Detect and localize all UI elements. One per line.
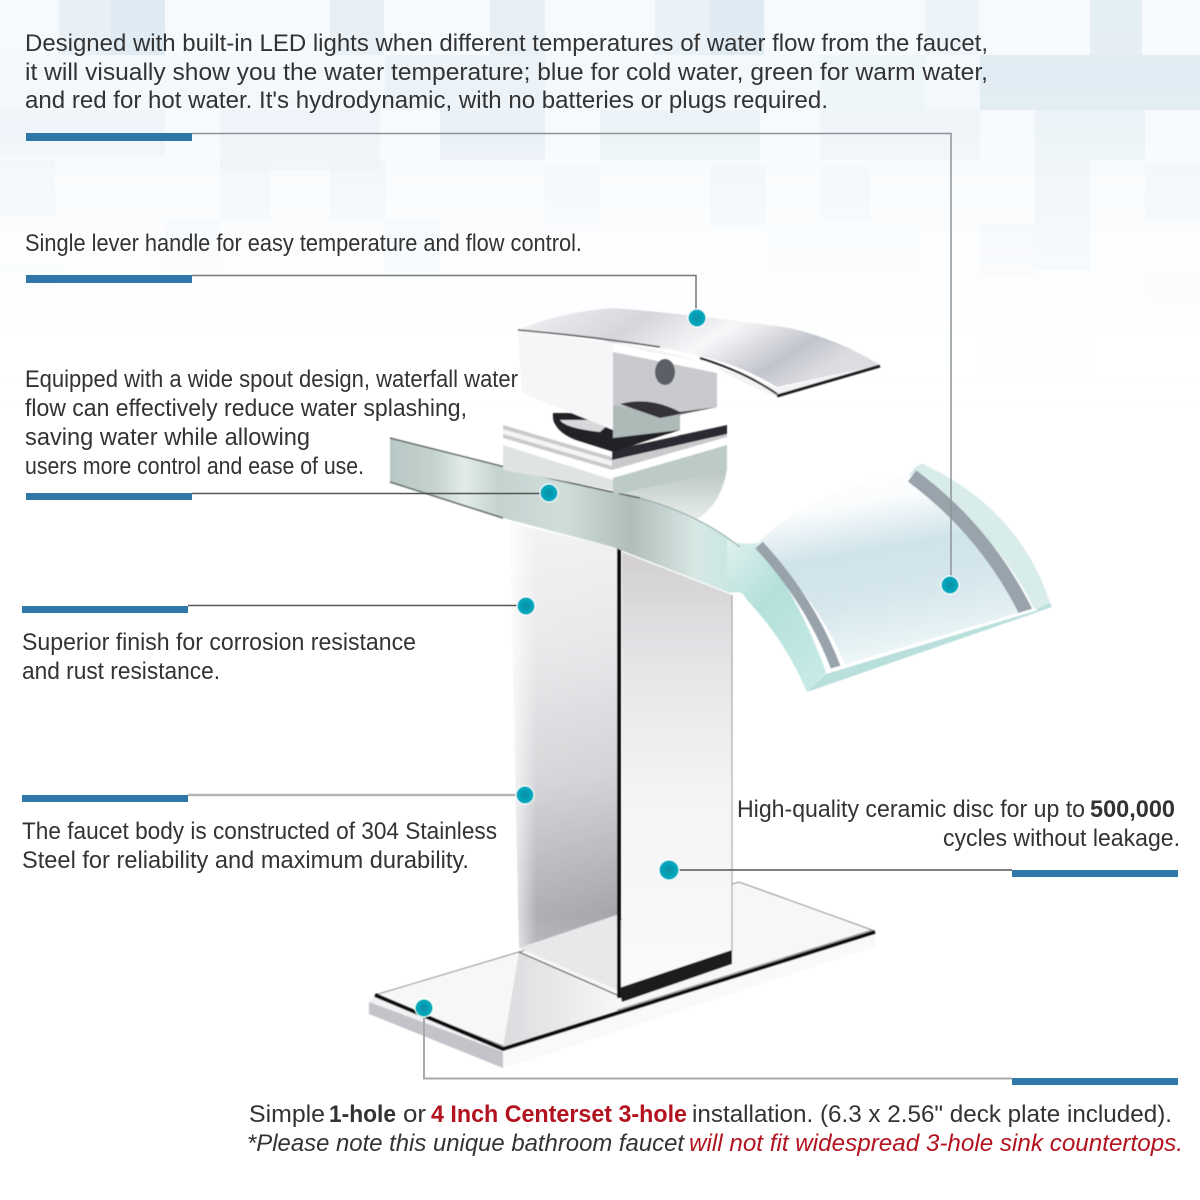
text: body: The faucet body is constructed of 304 Stainless: [22, 818, 497, 845]
text: ceramic: [737, 796, 1180, 852]
mirrored plate: [503, 445, 727, 490]
text: installation: installation. (6.3 x 2.56" deck plate included).: [692, 1101, 1172, 1128]
leader line and bar: [26, 275, 696, 318]
water sheet: [757, 474, 1026, 668]
text: installation: or: [403, 1101, 426, 1128]
text: spout: saving water while allowing: [25, 424, 310, 451]
callout: stainless body: [22, 795, 525, 874]
screw: [655, 359, 675, 385]
handle side panel: [613, 352, 717, 430]
text: finish: and rust resistance.: [22, 658, 220, 685]
text: finish: Superior finish for corrosion resistance: [22, 629, 416, 656]
text: spout: Equipped with a wide spout design, waterfall water: [25, 366, 518, 393]
text: finish: [22, 629, 416, 685]
text: spout: users more control and ease of use.: [25, 453, 364, 480]
spout top surface: [389, 420, 1050, 692]
text: ceramic: 500,000: [1090, 796, 1175, 823]
gray strips: [759, 545, 836, 668]
text: LED description: [25, 30, 988, 114]
glass lip: [807, 603, 1052, 692]
text: ceramic: High-quality ceramic disc for up to: [737, 796, 1085, 823]
text: body: [22, 818, 497, 874]
text: installation: 1-hole: [329, 1101, 396, 1128]
cartridge and square plate: [503, 413, 727, 495]
text: ceramic: cycles without leakage.: [943, 825, 1180, 852]
text: installation: Simple: [249, 1101, 325, 1128]
text: spout: flow can effectively reduce water splashing,: [25, 395, 467, 422]
faucet illustration: [369, 308, 1052, 1068]
handle body front: [518, 330, 613, 430]
callout: wide spout: [25, 366, 549, 500]
text: LED description: it will visually show you the water temperature; blue for cold water, green for warm water,: [25, 59, 988, 86]
lever top: [518, 308, 880, 387]
callout: LED temperature: [25, 30, 988, 585]
lever underside: [613, 343, 880, 397]
leader line and bar: [669, 870, 1178, 877]
deck plate: [369, 882, 875, 1068]
leader line and bar: [22, 606, 526, 613]
leader line and bar: [424, 1008, 1178, 1085]
text: LED description: Designed with built-in LED lights when different temperatures of water flow from the faucet,: [25, 30, 988, 57]
column: [510, 523, 732, 1002]
leader line and bar: [26, 493, 549, 500]
text: installation: [247, 1101, 1183, 1157]
leader line and bar: [26, 133, 951, 585]
glass spout: [389, 420, 1052, 692]
text: LED description: and red for hot water. It's hydrodynamic, with no batteries or plugs required.: [25, 87, 828, 114]
front band: [390, 438, 826, 692]
text: installation: will not fit widespread 3-hole sink countertops.: [689, 1130, 1183, 1157]
callout: ceramic disc: [669, 796, 1180, 877]
callout: finish: [22, 606, 526, 685]
reflection under plate: [612, 468, 727, 520]
callout: installation: [247, 1008, 1183, 1157]
text: body: Steel for reliability and maximum durability.: [22, 847, 469, 874]
leader line and bar: [22, 795, 525, 802]
text: installation: *Please note this unique bathroom faucet: [247, 1130, 685, 1157]
text: spout: [25, 366, 518, 480]
callout: lever handle: [25, 230, 696, 318]
outer right glass: [908, 464, 1050, 610]
text: lever: Single lever handle for easy temperature and flow control.: [25, 230, 582, 257]
text: installation: 4 Inch Centerset 3-hole: [431, 1101, 687, 1128]
handle: [518, 308, 880, 438]
callout dots: [415, 309, 959, 1017]
